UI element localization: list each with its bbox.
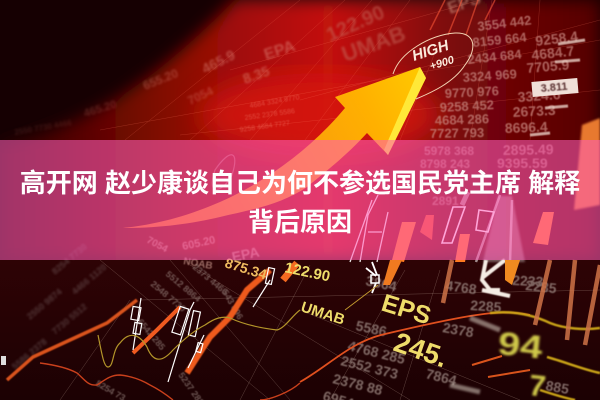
number table right: 8798 243 [420, 157, 470, 171]
dim data table bottom centre: 2373 4466 [191, 262, 230, 297]
faded dark matrix lower left: 7730 5512 [50, 302, 89, 337]
number table right: 8159 664 [472, 29, 528, 50]
highlighted value chip: 3.811 [540, 81, 568, 95]
white highlights right [450, 318, 500, 392]
faded small figures centre [239, 94, 300, 134]
number table right: 4684.7 [531, 43, 575, 63]
label 122.90: 122.90 [283, 259, 332, 285]
label 94: 94 [496, 325, 544, 366]
faded headline figures top: 122.90 [323, 2, 388, 47]
large right candles [443, 260, 600, 345]
dim data table bottom right: 2233 [512, 272, 544, 290]
dim data table bottom right: 2285 [525, 277, 558, 296]
red glow panel upper right [0, 0, 600, 260]
number table right: 9770 976 [444, 83, 499, 101]
label EPS: EPS [378, 289, 434, 330]
number table right: 2673.3 [512, 102, 556, 120]
faded figures behind banner bottom: EPA [230, 244, 261, 265]
number table right: 7727 793 [430, 125, 484, 141]
high +900 callout [393, 33, 473, 99]
candlesticks behind banner [350, 192, 554, 262]
label 875.34: 875.34 [223, 255, 269, 282]
faded dark matrix lower left: 2550 9874 [25, 287, 64, 322]
faded figures behind banner bottom: NOAB [182, 256, 213, 272]
faded figures upper left [14, 38, 298, 137]
faded figures upper left: 655.20 [141, 66, 180, 93]
label 245: 245. [390, 326, 452, 373]
callout ellipse [393, 33, 473, 99]
dim data table bottom centre: 6542 285 [135, 317, 167, 352]
number table right: 9395.59 [497, 155, 548, 171]
callout text +900: +900 [428, 54, 456, 73]
dim data table bottom right: 5586 [354, 317, 388, 339]
dim data table bottom right: 2552 373 [339, 352, 400, 382]
number table right: 4684 286 [435, 111, 489, 128]
number table right: 2895.49 [503, 141, 554, 158]
orange candlestick chart lower left [1, 263, 297, 380]
yellow moving average line [98, 310, 300, 367]
number table right: 7705.9 [526, 56, 570, 76]
number table right: 3554 442 [477, 12, 532, 34]
faded figures upper left: 7054 [185, 84, 216, 108]
rising yellow arrow [123, 67, 426, 228]
dark lower panel [0, 260, 600, 400]
number table right [420, 12, 579, 208]
faded dark matrix lower left: 5586 2378 [10, 337, 49, 372]
faded figures behind banner bottom: 605.20 [181, 234, 217, 253]
orange dashes [472, 356, 530, 377]
dim data table bottom right: 7864 [424, 365, 459, 388]
number table right: 2891 [432, 194, 459, 208]
dim data table bottom centre: 2548 7730 [149, 279, 188, 314]
faded headline figures top [323, 0, 483, 67]
faded figures behind banner bottom [145, 234, 261, 272]
dim data table bottom right: 2285 [470, 297, 502, 315]
arrow head and shaft [123, 67, 426, 228]
dim data table bottom centre: 5512 8864 [164, 269, 203, 304]
number table right: 8696.4 [505, 119, 548, 136]
number table right: 2434 684 [467, 46, 523, 67]
faded figures behind banner bottom: 7054 [145, 235, 170, 255]
yellow metric labels bottom [223, 255, 547, 400]
faded dark matrix lower left [10, 242, 108, 372]
dim data table bottom right: 4768 285 [346, 337, 407, 367]
title line 2: 背后原因 [248, 207, 352, 237]
faded figures upper left: 8.35 [241, 62, 272, 87]
white candlesticks lower left [131, 268, 275, 382]
number table right: 3324.6 [517, 86, 561, 105]
faded figures upper left: 2550 7730 4466 [14, 118, 73, 137]
label UMAB: UMAB [299, 299, 347, 329]
title banner [0, 140, 600, 260]
faded dark matrix lower left: 4466 1120 [70, 262, 108, 297]
faded small figures centre: 2552 2378 5586 [244, 108, 295, 122]
faded figures upper left: 465.20 [82, 99, 118, 120]
number table right: 9258 452 [439, 97, 494, 115]
dim data table bottom right: 4768 [445, 277, 478, 297]
dim data table bottom centre: 543 896 [220, 288, 245, 321]
arrow bright side face [384, 67, 426, 155]
candlestick pair centre [345, 260, 402, 310]
faint ring and figures left of banner [212, 155, 235, 189]
highlighted value chip [531, 78, 579, 97]
yellow line segment right [490, 312, 600, 400]
number table right: 9258.4 [534, 28, 579, 49]
red-to-yellow moving average line right [300, 312, 530, 382]
faded figures upper left: EPA [262, 38, 298, 64]
number table right: 5978 368 [424, 144, 474, 158]
title line 1: 高开网 赵少康谈自己为何不参选国民党主席 解释 [20, 168, 580, 198]
candlesticks top [430, 0, 495, 35]
dim data table bottom right: 2378 88 [331, 370, 384, 398]
dim data table bottom right: 2378 [441, 319, 475, 340]
white highlighted dashes right [530, 40, 585, 135]
faded small figures centre: 4684 3324 9770 [249, 94, 300, 110]
dim data table bottom right [321, 272, 570, 400]
dim data table bottom right: 885 [544, 377, 570, 397]
faded small figures centre: 9258 4684 7727 [239, 120, 290, 134]
number table right: 3324 969 [462, 66, 517, 85]
red moving average line left [40, 363, 300, 400]
dim data table bottom right: 3864 [364, 272, 398, 294]
faded figures upper left: 465.9 [199, 46, 238, 77]
callout text HIGH: HIGH [410, 37, 452, 65]
bright red centre glow [200, 73, 440, 157]
grid lines upper [100, 0, 600, 140]
dim data table bottom centre [94, 262, 245, 400]
faded headline figures top: UMAB [338, 21, 409, 67]
big orange bar right [574, 118, 600, 210]
faded dark matrix lower left: 8254 7730 [50, 242, 89, 277]
dim grid lines lower [60, 260, 600, 400]
